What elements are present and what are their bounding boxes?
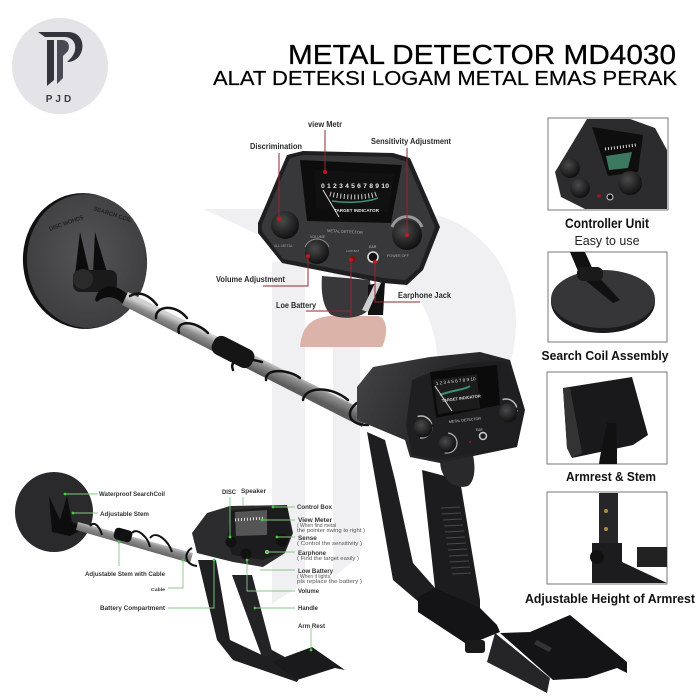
meter hood	[430, 365, 500, 418]
callout labels: Loe Battery	[276, 300, 316, 310]
diagram labels: Arm Rest	[298, 623, 326, 630]
diagram labels: Volume	[298, 588, 319, 595]
arm rest block	[487, 633, 550, 693]
meter window	[300, 160, 402, 223]
red leader lines	[263, 130, 420, 316]
large detector photo: 1 2 3 4 5 6 7 8 9 10	[436, 376, 476, 386]
hand-held controller photo: LOW BAT	[346, 249, 359, 253]
diagram labels: Waterproof SearchCoil	[99, 491, 165, 498]
diagram notes: ( When it lights,	[297, 574, 331, 580]
diagram labels	[85, 488, 333, 630]
volume knob	[305, 240, 329, 264]
grip ribs	[441, 507, 471, 574]
diagram labels: Adjustable Stem with Cable	[85, 571, 165, 578]
hand-held controller photo: METAL DETECTOR	[327, 228, 363, 235]
stem	[76, 522, 193, 563]
panel: armrest and stem	[547, 372, 667, 484]
diagram notes: ( When find metal	[297, 523, 336, 529]
caption: Controller Unit	[565, 216, 649, 231]
telescopic stem	[122, 292, 368, 427]
search coil	[15, 472, 93, 552]
hand-held controller photo	[216, 119, 451, 347]
coiled cable	[130, 294, 368, 425]
front panel	[406, 361, 523, 460]
subtitle: ALAT DETEKSI LOGAM METAL EMAS PERAK	[213, 68, 678, 90]
callout labels: Discrimination	[250, 141, 302, 151]
handle	[422, 470, 480, 617]
panel: search coil assembly	[542, 252, 669, 363]
hand-held controller photo: ALL METAL	[274, 244, 293, 248]
large detector photo: TARGET INDICATOR	[442, 393, 481, 403]
hand-held controller photo: 0 1 2 3 4 5 6 7 8 9 10	[321, 183, 389, 190]
diagram labels: Speaker	[241, 488, 267, 495]
diagram notes: the pointer swing to right )	[297, 528, 365, 534]
controller body	[258, 151, 440, 285]
diagram labels: Handle	[298, 605, 318, 612]
left knob	[271, 211, 299, 239]
diagram labels: Control Box	[297, 504, 332, 511]
right knob	[392, 220, 422, 250]
cable clamp	[209, 333, 257, 371]
callout labels	[216, 119, 451, 310]
hand	[300, 316, 386, 347]
callout labels: Volume Adjustment	[216, 274, 285, 284]
hand-held controller photo: EAR	[369, 245, 377, 249]
bracket	[49, 496, 85, 536]
hand-held controller photo: POWER OFF	[387, 254, 410, 258]
caption: Search Coil Assembly	[542, 349, 669, 363]
diagram notes: pls replace the battery )	[297, 579, 362, 585]
meter	[433, 374, 480, 414]
panel: adjustable height	[525, 492, 696, 606]
large detector photo	[16, 187, 627, 693]
large detector photo: METAL DETECTOR	[449, 417, 482, 424]
control housing	[357, 352, 525, 463]
caption: Adjustable Height of Armrest	[525, 592, 696, 606]
watermark: brand P	[203, 209, 516, 604]
cable wraps	[90, 524, 197, 566]
rear arm	[198, 560, 305, 682]
large detector photo: EAR	[476, 428, 483, 432]
diagram labels: Battery Compartment	[100, 605, 166, 612]
diagram labels: Low Battery	[298, 568, 333, 575]
search coil: SEARCH COIL	[92, 206, 133, 224]
caption: easy to use: Easy to use	[574, 234, 640, 248]
green leader lines	[65, 494, 311, 650]
earphone jack	[368, 252, 378, 262]
diagram labels: Cable	[151, 587, 165, 592]
logo: PJD badge: PJD	[46, 94, 74, 105]
panel: controller unit	[548, 118, 668, 248]
arm rest rail	[418, 588, 500, 645]
callout labels: Sensitivity Adjustment	[371, 136, 451, 146]
callout labels: Earphone Jack	[398, 290, 451, 300]
low battery led	[350, 256, 356, 262]
callout labels: view Metr	[308, 119, 343, 129]
hand-held controller photo: VOLUME	[310, 235, 326, 239]
title: METAL DETECTOR MD4030	[288, 39, 676, 70]
hand-held controller photo: TARGET INDICATOR	[334, 208, 380, 213]
diagram labels: Adjustable Stem	[100, 511, 149, 518]
logo: PJD badge	[12, 18, 108, 114]
diagram labels: View Meter	[298, 517, 333, 524]
diagram labels: Sense	[298, 535, 317, 542]
title	[213, 39, 678, 90]
diagram labels: DISC	[222, 489, 236, 496]
pistol grip	[322, 276, 372, 318]
meter arc	[330, 194, 376, 197]
search coil	[16, 187, 154, 335]
diagram notes: ( Find the target easily )	[297, 556, 359, 562]
diagram notes: ( Control the sensitivity )	[297, 541, 362, 547]
small labelled diagram	[15, 472, 365, 682]
handle	[232, 575, 273, 657]
diagram labels: Earphone	[298, 550, 326, 557]
knobs	[410, 416, 432, 438]
clamp	[113, 527, 133, 543]
trigger guard	[440, 455, 474, 487]
control box	[192, 505, 293, 567]
rear arm	[367, 432, 497, 637]
caption: Armrest & Stem	[566, 470, 656, 484]
arm rest	[272, 647, 345, 680]
search coil: DISC WOHDS	[49, 215, 85, 233]
diagram notes	[297, 523, 365, 585]
arm rest wing	[500, 615, 627, 680]
